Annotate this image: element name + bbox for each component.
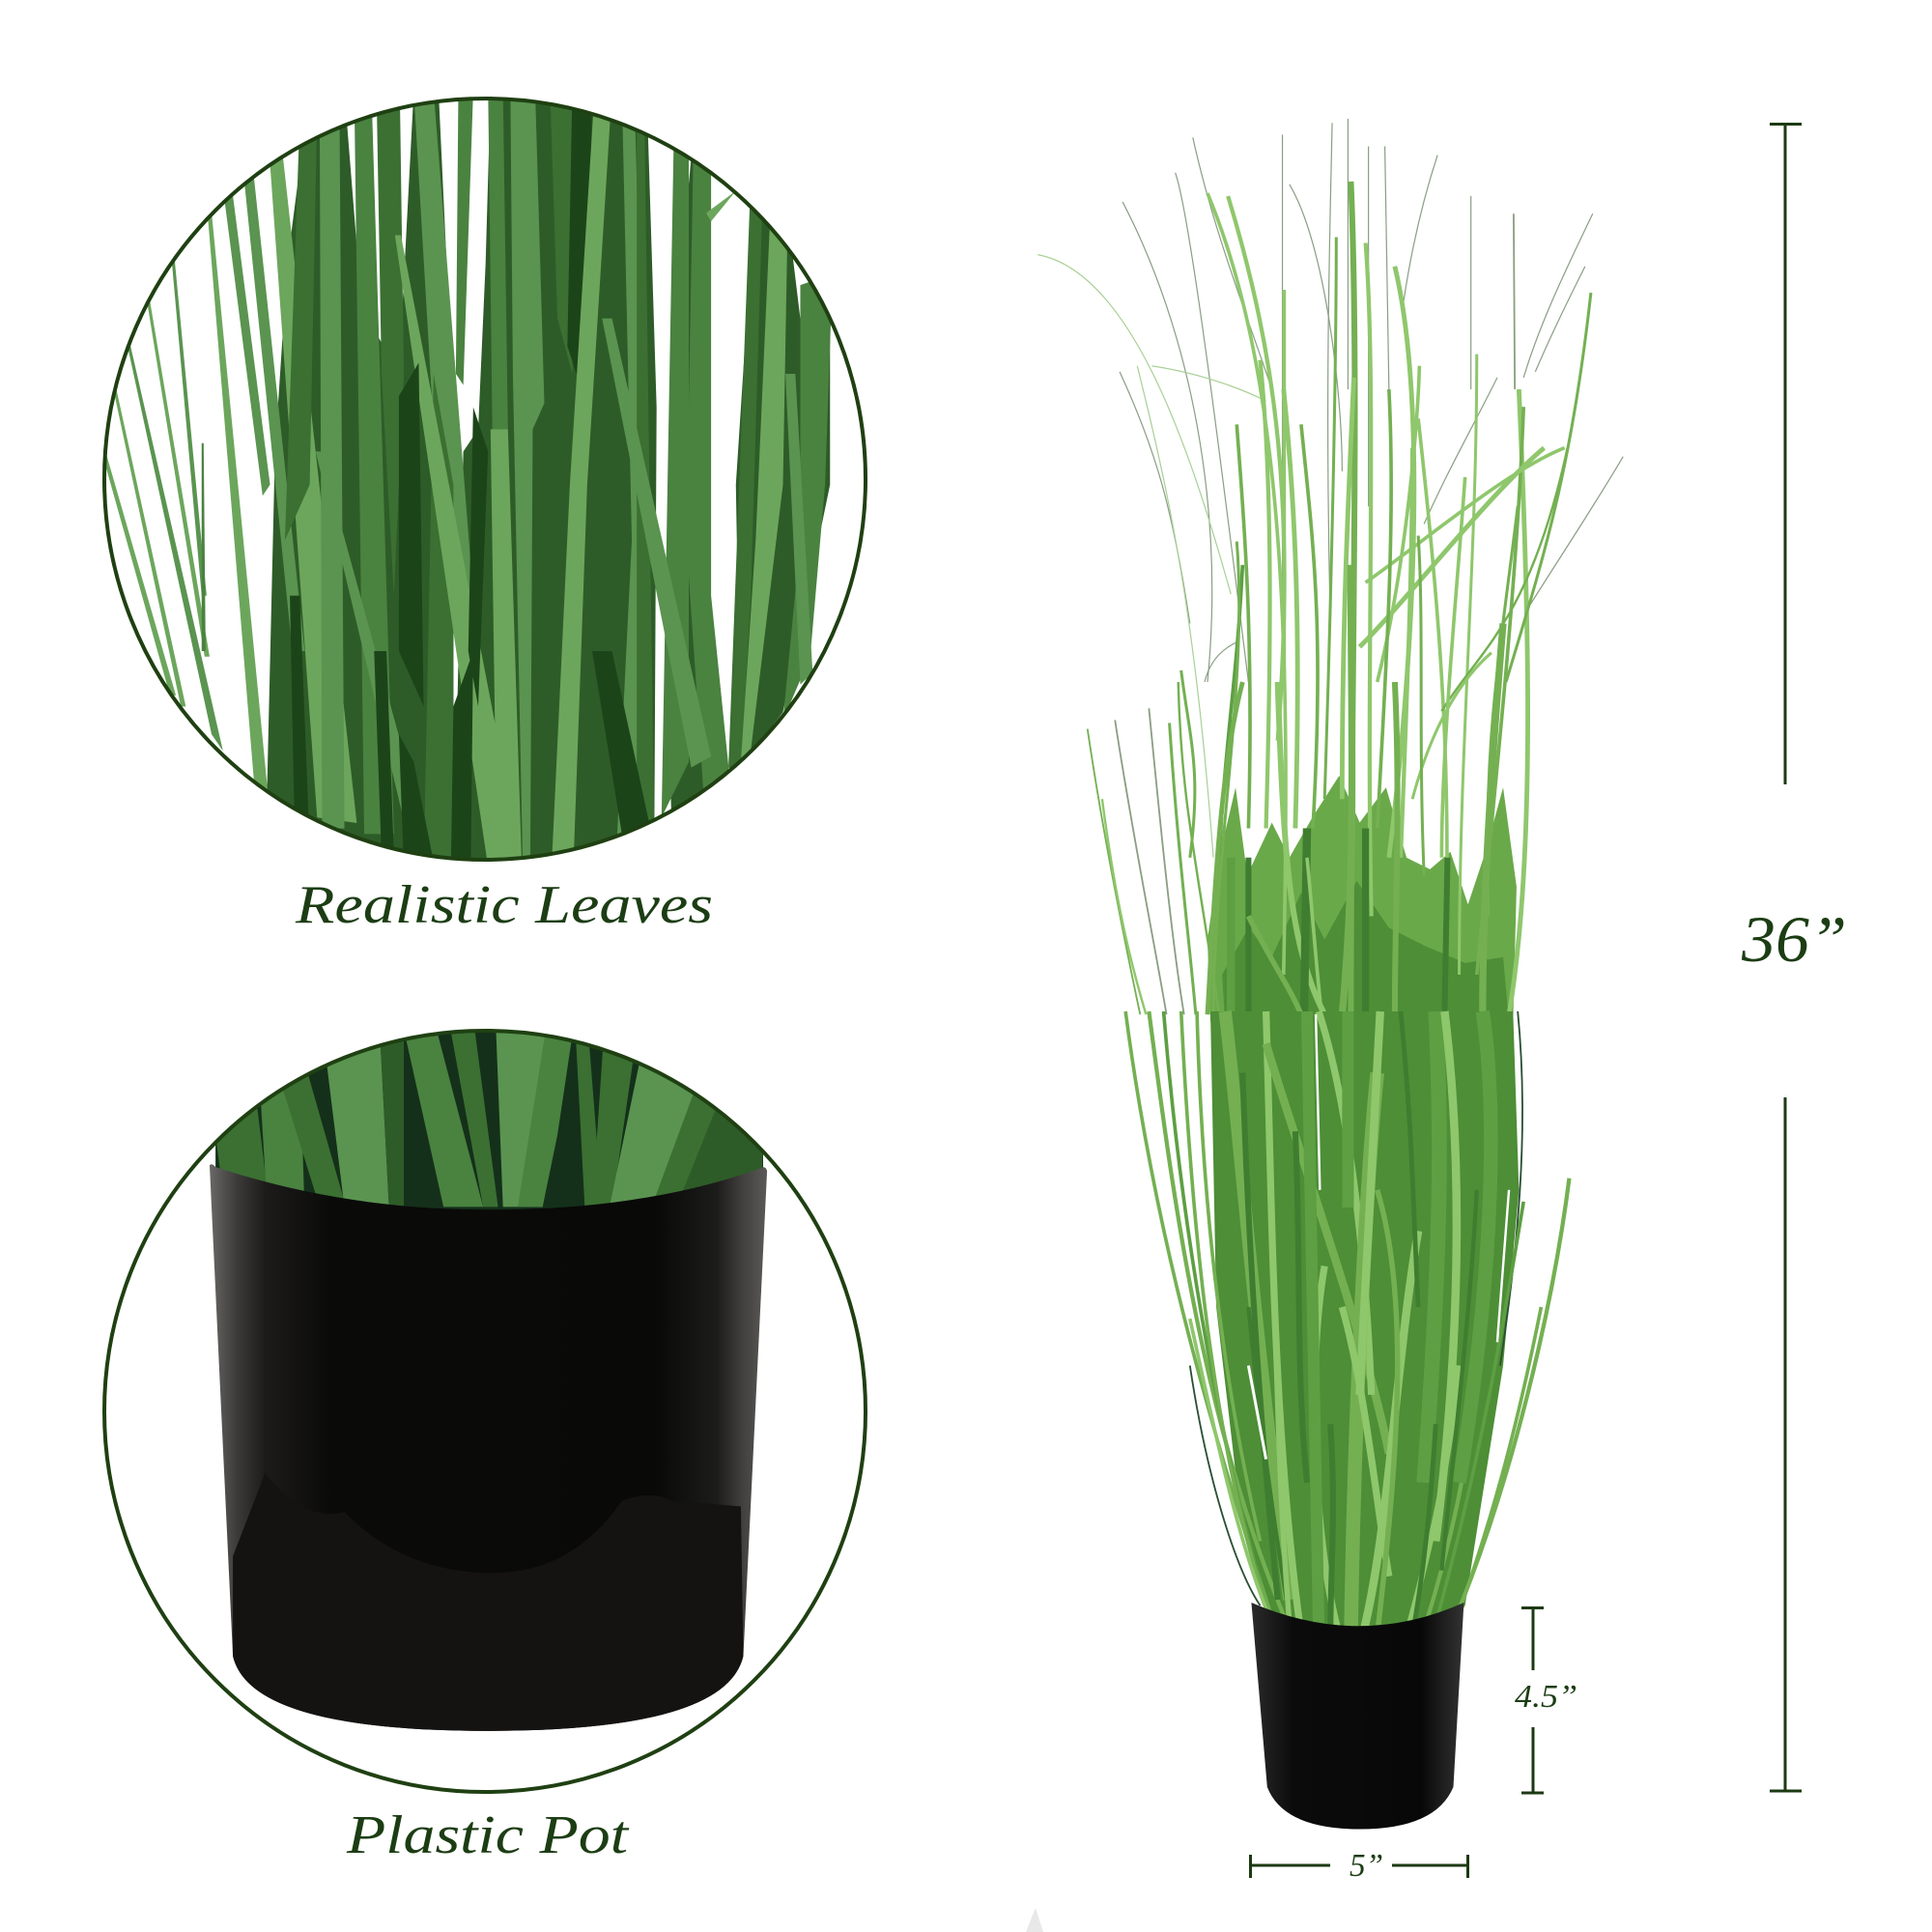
pot body bbox=[210, 1164, 767, 1731]
illustration: full grass plant bbox=[1037, 119, 1623, 1830]
label: Plastic Pot: Plastic Pot bbox=[346, 1805, 630, 1865]
small pot bbox=[1251, 1603, 1463, 1830]
label: 5 inches: 5” bbox=[1350, 1848, 1383, 1884]
panel: plastic pot close-up bbox=[104, 1018, 866, 1792]
leaves in pot bbox=[215, 1018, 763, 1212]
lower grass blades bbox=[1125, 1011, 1569, 1646]
label: Realistic Leaves: Realistic Leaves bbox=[295, 875, 713, 935]
upper grass blades bbox=[1037, 119, 1623, 1021]
pot and leaves clipped to circle bbox=[210, 1018, 767, 1731]
label: 4.5 inches: 4.5” bbox=[1515, 1679, 1577, 1715]
panel: realistic leaves close-up bbox=[101, 91, 866, 873]
artefact: faint grey corner shape bbox=[1026, 1908, 1043, 1932]
leaf blades clipped to circle bbox=[101, 91, 833, 873]
circle outline bbox=[104, 1031, 866, 1792]
pot lower reflection bbox=[233, 1473, 743, 1731]
circle outline bbox=[104, 99, 866, 860]
label: 36 inches: 36” bbox=[1741, 902, 1847, 976]
